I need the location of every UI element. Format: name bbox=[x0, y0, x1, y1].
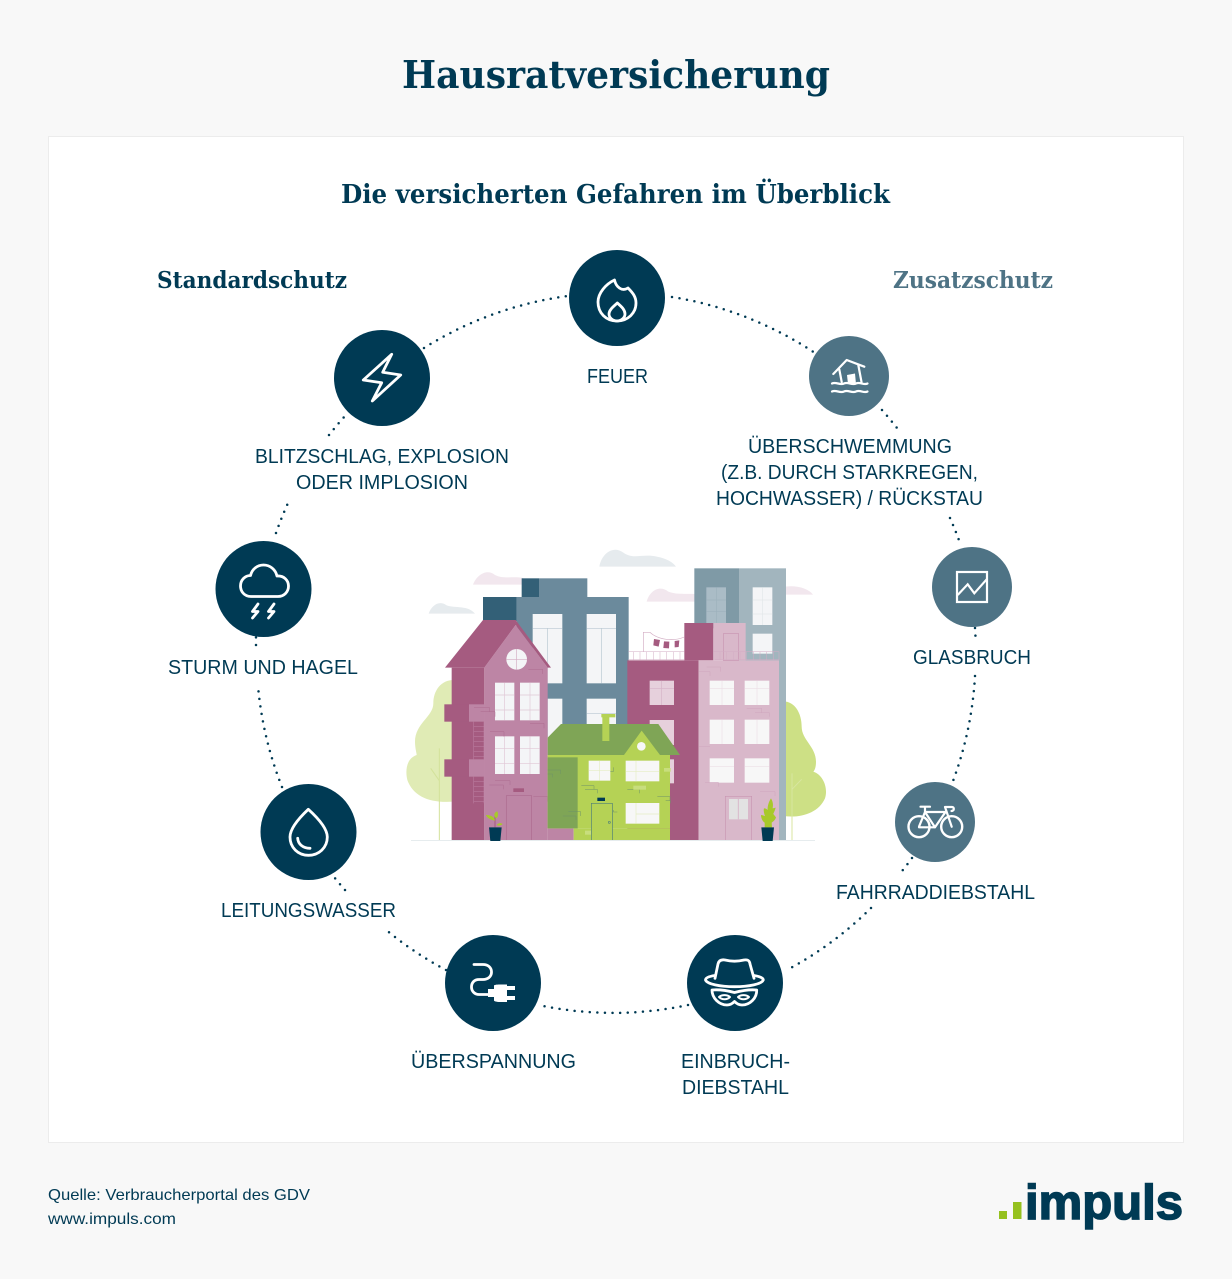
icon: water drop bbox=[260, 784, 356, 880]
subtitle: Die versicherten Gefahren im Überblick bbox=[341, 178, 891, 210]
item: Fahrraddiebstahl bbox=[836, 782, 1035, 904]
item: Überschwemmung bbox=[716, 336, 983, 510]
title: Hausratversicherung bbox=[402, 52, 830, 97]
dotted ring bbox=[256, 296, 976, 1013]
label: GLASBRUCH bbox=[913, 647, 1031, 669]
icon: storm cloud bbox=[216, 541, 312, 637]
label: HOCHWASSER) / RÜCKSTAU bbox=[716, 488, 983, 510]
item: Leitungswasser bbox=[221, 784, 396, 922]
icon: cracked glass bbox=[932, 547, 1012, 627]
rear blue building bbox=[483, 578, 629, 737]
right pink building bbox=[699, 623, 779, 841]
illustration: houses bbox=[406, 550, 826, 841]
icon: lightning bolt bbox=[334, 330, 430, 426]
item: Sturm und Hagel bbox=[168, 541, 358, 679]
icon: flame bbox=[569, 250, 665, 346]
label: DIEBSTAHL bbox=[682, 1077, 789, 1099]
icon: burglar hat and mask bbox=[687, 935, 783, 1031]
logo: impuls: impuls bbox=[1025, 1176, 1183, 1230]
label: ODER IMPLOSION bbox=[296, 472, 468, 494]
label: (Z.B. DURCH STARKREGEN, bbox=[721, 462, 978, 484]
middle magenta building bbox=[627, 623, 713, 841]
item: Feuer bbox=[569, 250, 665, 388]
icon: bicycle bbox=[895, 782, 975, 862]
label: STURM UND HAGEL bbox=[168, 657, 358, 679]
plant pot right bbox=[761, 798, 776, 841]
item: Einbruchdiebstahl bbox=[681, 935, 790, 1099]
item: Überspannung bbox=[411, 935, 576, 1073]
ground line bbox=[411, 840, 815, 841]
label: ÜBERSPANNUNG bbox=[411, 1051, 576, 1073]
label: EINBRUCH- bbox=[681, 1051, 790, 1073]
clouds bbox=[429, 550, 813, 614]
left pink house bbox=[444, 620, 551, 841]
trees bbox=[406, 680, 826, 840]
label: BLITZSCHLAG, EXPLOSION bbox=[255, 446, 509, 468]
label: LEITUNGSWASSER bbox=[221, 900, 396, 922]
icon: flooded house bbox=[809, 336, 889, 416]
roof railings and laundry bbox=[628, 632, 779, 660]
label: ÜBERSCHWEMMUNG bbox=[748, 436, 952, 458]
plant pot left bbox=[486, 811, 503, 841]
front green house bbox=[548, 714, 680, 841]
item: Glasbruch bbox=[913, 547, 1031, 669]
item: Blitzschlag bbox=[255, 330, 509, 494]
rear right tower bbox=[694, 568, 786, 841]
icon: power plug bbox=[445, 935, 541, 1031]
label: FAHRRADDIEBSTAHL bbox=[836, 882, 1035, 904]
source note: Quelle: Verbraucherportal des GDV bbox=[48, 1187, 310, 1204]
heading: Zusatzschutz: Zusatzschutz bbox=[893, 267, 1053, 294]
label: FEUER bbox=[587, 366, 648, 388]
source note: www.impuls.com bbox=[47, 1211, 176, 1228]
panel: main card bbox=[48, 136, 1184, 1142]
heading: Standardschutz: Standardschutz bbox=[157, 267, 347, 294]
